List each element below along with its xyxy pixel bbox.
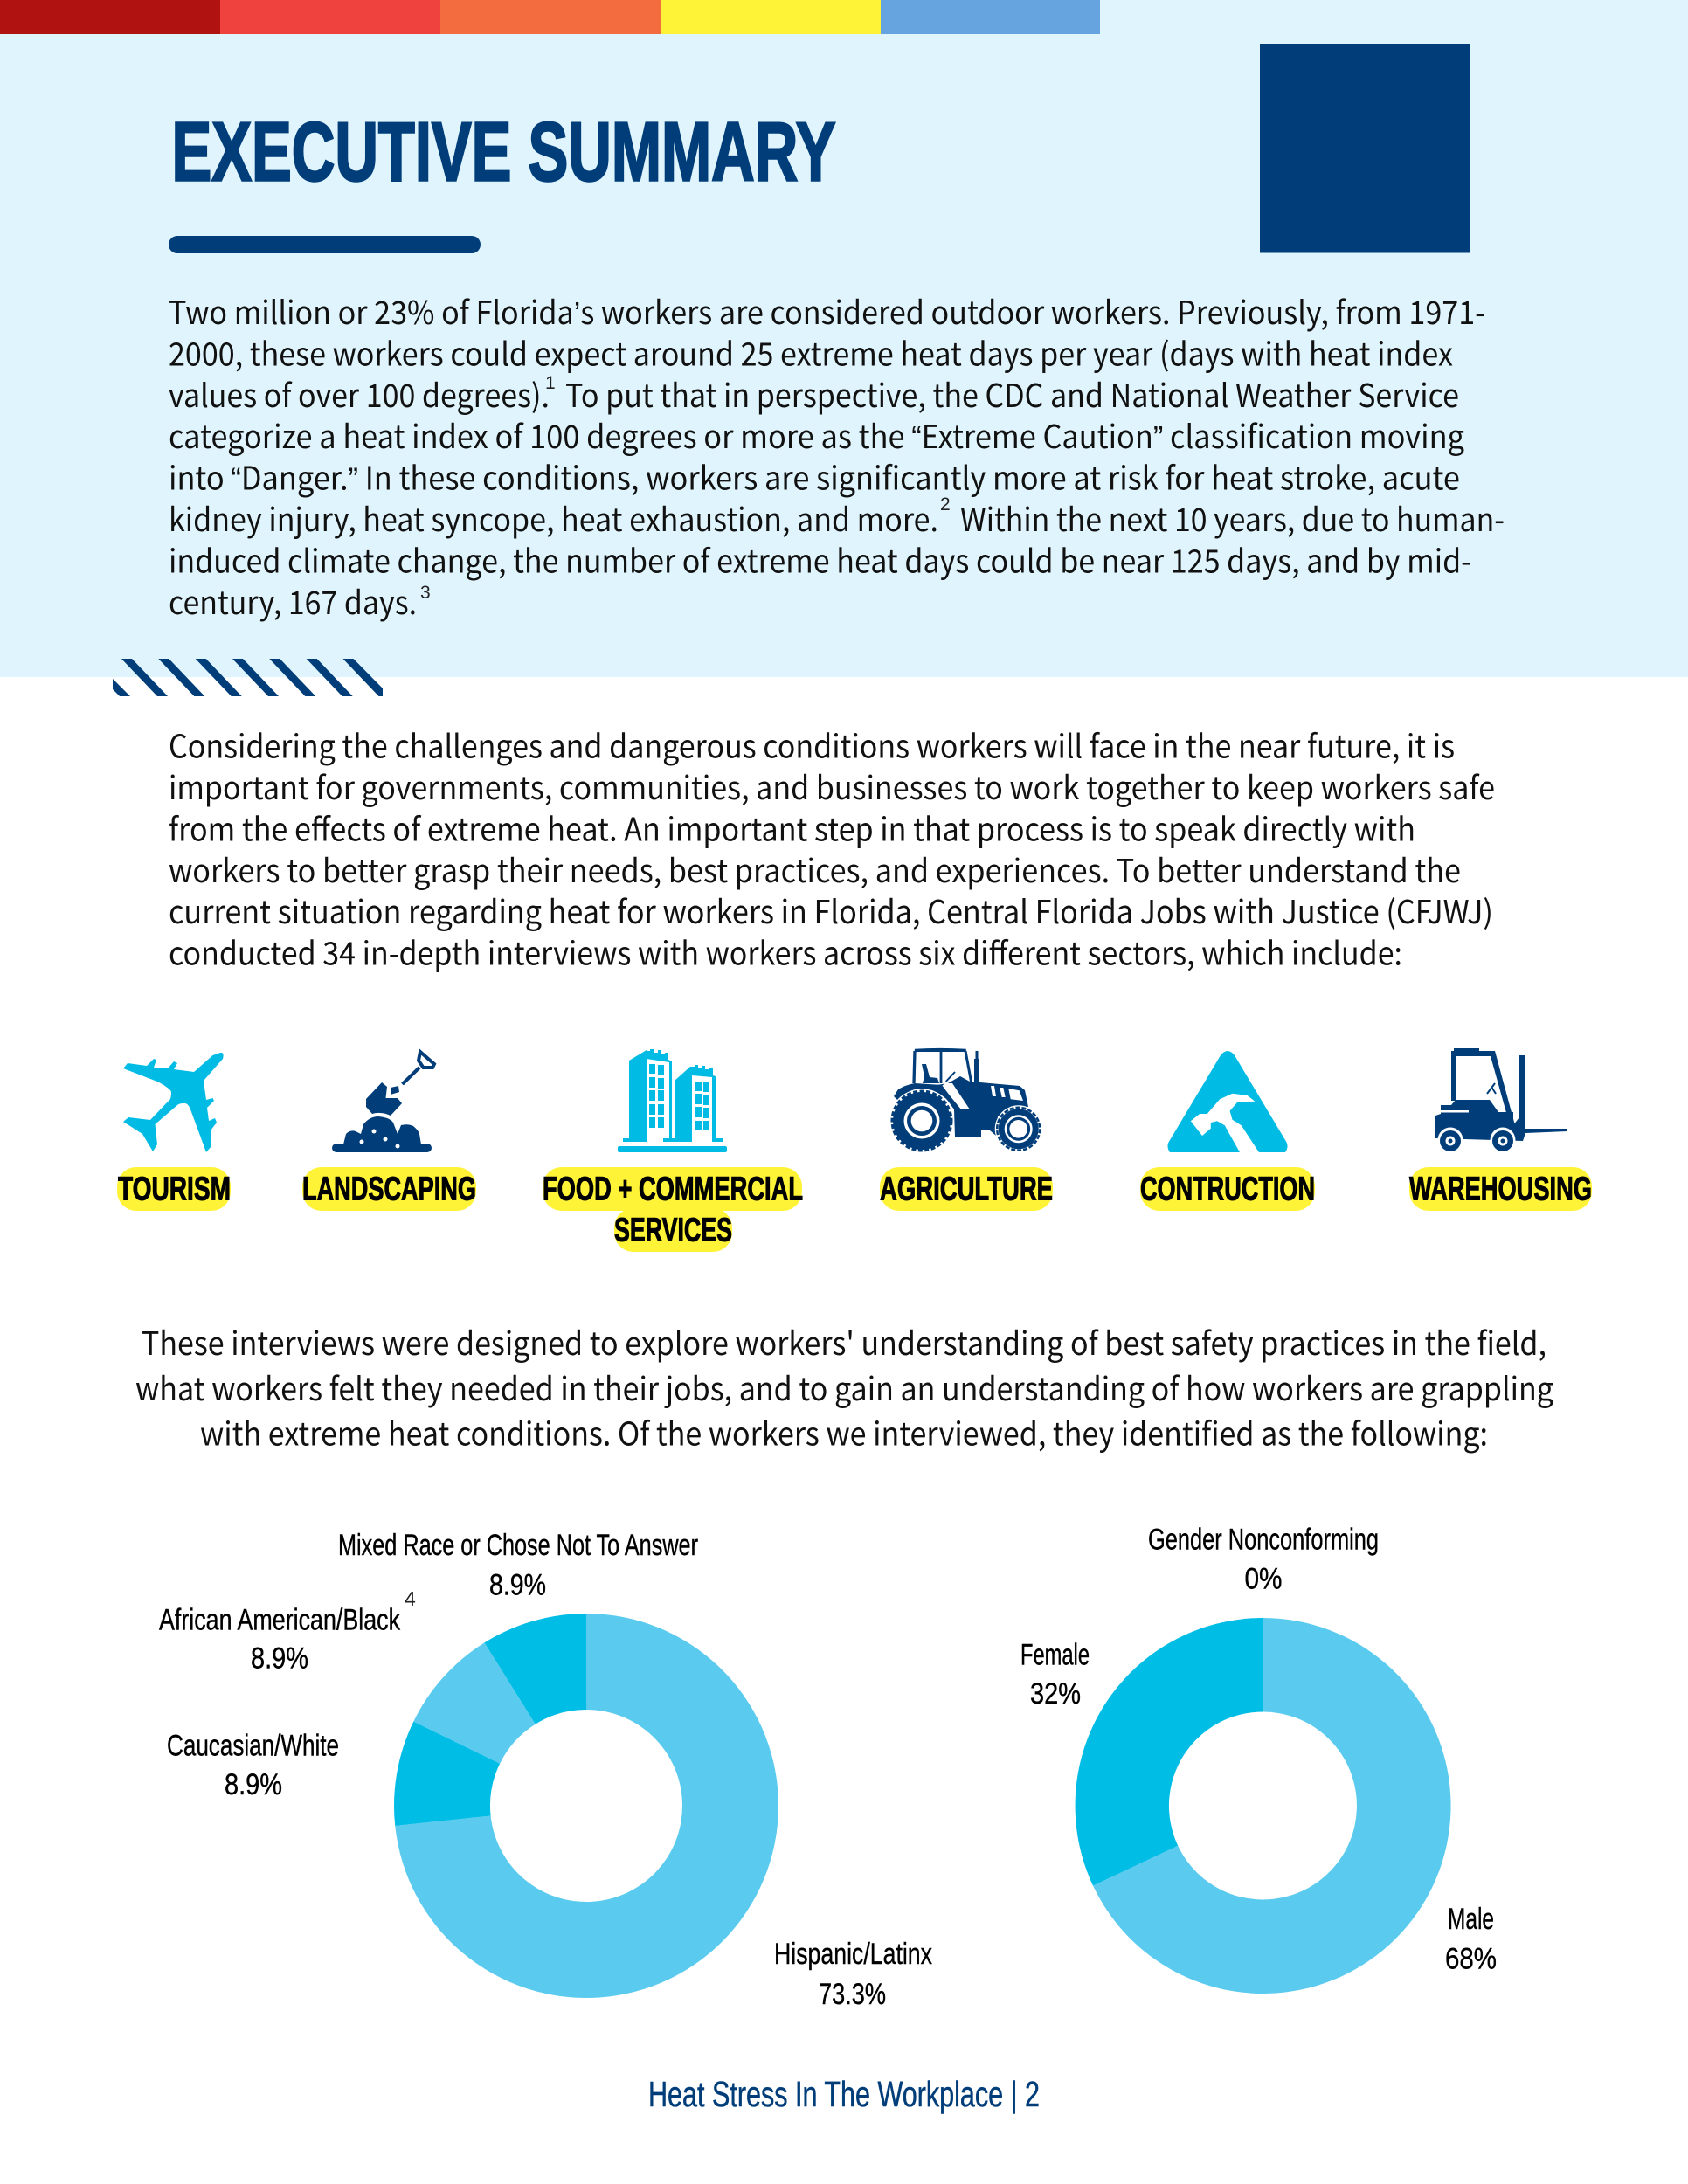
chart: gender donut	[1076, 1618, 1451, 1994]
icon: forklift	[1435, 1048, 1567, 1153]
centered paragraph: These interviews were designed to explore workers' understanding of best safety practices in the field,	[142, 1318, 1546, 1365]
label: mixed race	[338, 1529, 698, 1602]
label: contruction: CONTRUCTION	[1140, 1171, 1315, 1207]
label: gender nonconforming	[1148, 1524, 1379, 1595]
intro paragraph: 3	[420, 583, 431, 603]
hatched stripe accent	[113, 659, 383, 696]
label: hispanic: 73.3%	[819, 1978, 886, 2011]
chart: race and ethnicity donut	[394, 1614, 778, 1998]
label: african american: 4	[405, 1587, 416, 1610]
label: hispanic	[774, 1938, 932, 2011]
label: hispanic: Hispanic/Latinx	[774, 1938, 932, 1971]
second paragraph	[169, 722, 1495, 975]
icon: landscaping shovel and soil	[332, 1052, 434, 1152]
centered paragraph: what workers felt they needed in their jobs, and to gain an understanding of how workers are grappling	[135, 1364, 1553, 1410]
label: african american: 8.9%	[251, 1642, 308, 1676]
label: mixed race: Mixed Race or Chose Not To Answer	[338, 1529, 698, 1562]
intro paragraph: Within the next 10 years, due to human-	[960, 494, 1505, 541]
second paragraph: current situation regarding heat for workers in Florida, Central Florida Jobs with Justice (CFJWJ)	[169, 887, 1493, 933]
label: female: Female	[1020, 1639, 1090, 1672]
title underline	[169, 236, 481, 253]
label: agriculture: AGRICULTURE	[880, 1171, 1053, 1207]
label: warehousing	[1409, 1167, 1592, 1211]
colour bar strip	[0, 0, 1100, 34]
intro paragraph: induced climate change, the number of extreme heat days could be near 125 days, and by mid-	[169, 536, 1471, 582]
label: food + commercial services	[543, 1167, 803, 1252]
label: african american: African American/Black	[159, 1604, 401, 1637]
label: food + commercial services: SERVICES	[614, 1213, 732, 1249]
label: contruction	[1140, 1167, 1315, 1211]
intro paragraph: kidney injury, heat syncope, heat exhaustion, and more.	[169, 494, 938, 541]
label: agriculture	[880, 1167, 1053, 1211]
label: mixed race: 8.9%	[489, 1569, 546, 1602]
header panel background	[0, 0, 1688, 677]
label: caucasian	[167, 1730, 339, 1801]
second paragraph: Considering the challenges and dangerous conditions workers will face in the near future, it is	[169, 722, 1455, 767]
second paragraph: workers to better grasp their needs, best practices, and experiences. To better understand the	[169, 846, 1461, 892]
label: male	[1445, 1903, 1497, 1976]
icon: airplane	[123, 1053, 224, 1152]
intro paragraph	[169, 287, 1505, 624]
label: landscaping	[302, 1167, 476, 1211]
intro paragraph: categorize a heat index of 100 degrees or more as the “Extreme Caution” classification moving	[169, 411, 1464, 458]
icon: construction hammer sign	[1167, 1051, 1288, 1152]
title: EXECUTIVE SUMMARY	[171, 105, 835, 199]
intro paragraph: into “Danger.” In these conditions, workers are significantly more at risk for heat stroke, acute	[169, 453, 1460, 500]
centered paragraph: with extreme heat conditions. Of the workers we interviewed, they identified as the following:	[200, 1408, 1488, 1455]
icon: tractor	[889, 1048, 1042, 1153]
second paragraph: from the effects of extreme heat. An important step in that process is to speak directly with	[169, 804, 1415, 851]
label: tourism	[117, 1167, 231, 1211]
navy square	[1260, 44, 1470, 253]
centered paragraph	[135, 1318, 1553, 1455]
label: gender nonconforming: 0%	[1244, 1562, 1283, 1595]
intro paragraph: 1	[545, 373, 556, 393]
label: food + commercial services: FOOD + COMMERCIAL	[543, 1171, 803, 1207]
intro paragraph: To put that in perspective, the CDC and National Weather Service	[565, 370, 1459, 417]
second paragraph: conducted 34 in-depth interviews with workers across six different sectors, which include:	[169, 928, 1402, 975]
intro paragraph: century, 167 days.	[169, 577, 417, 624]
label: caucasian: 8.9%	[225, 1768, 282, 1801]
intro paragraph: 2	[940, 494, 951, 515]
intro paragraph: values of over 100 degrees).	[169, 370, 550, 417]
intro paragraph: 2000, these workers could expect around 25 extreme heat days per year (days with heat index	[169, 328, 1453, 376]
label: male: 68%	[1445, 1943, 1497, 1976]
footer: Heat Stress In The Workplace | 2	[648, 2074, 1040, 2114]
label: female: 32%	[1030, 1677, 1081, 1711]
label: caucasian: Caucasian/White	[167, 1730, 339, 1763]
label: african american	[159, 1587, 416, 1676]
label: male: Male	[1448, 1903, 1494, 1936]
second paragraph: important for governments, communities, and businesses to work together to keep workers safe	[169, 763, 1495, 809]
icon: buildings	[618, 1049, 727, 1152]
label: female	[1020, 1639, 1090, 1711]
label: warehousing: WAREHOUSING	[1409, 1171, 1592, 1207]
label: landscaping: LANDSCAPING	[302, 1171, 476, 1207]
intro paragraph: Two million or 23% of Florida’s workers are considered outdoor workers. Previously, from 1971-	[169, 287, 1485, 334]
label: tourism: TOURISM	[118, 1171, 231, 1207]
label: gender nonconforming: Gender Nonconforming	[1148, 1524, 1379, 1557]
